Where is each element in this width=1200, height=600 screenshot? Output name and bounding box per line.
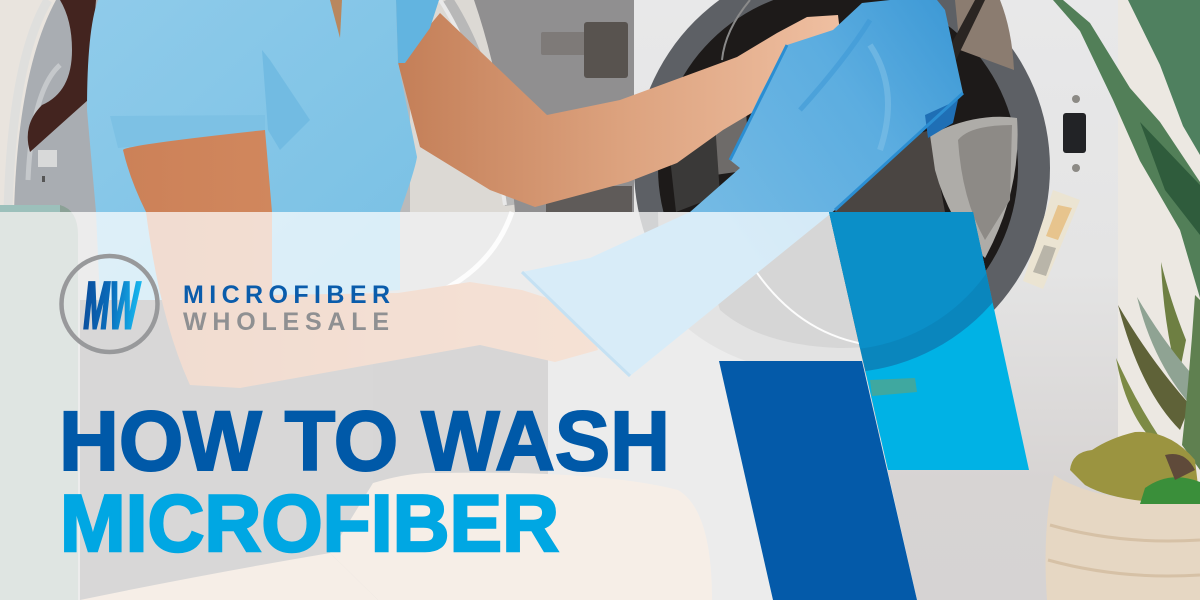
title line: microfiber: MICROFIBER [60, 479, 559, 569]
cyan parallelogram [829, 212, 1029, 470]
blue microfiber towel [522, 0, 963, 376]
drum with gasket [634, 0, 1050, 310]
plants and pot [1046, 0, 1200, 600]
machine details: latch, screws and safety sticker [1023, 95, 1086, 289]
logo ring [62, 256, 158, 352]
pot [1046, 475, 1200, 600]
aloe leaves [1053, 0, 1200, 298]
open door: left panel [8, 0, 100, 212]
left arm and hand [123, 130, 598, 388]
right arm [398, 13, 840, 207]
door ring at right of person [410, 0, 520, 300]
logo [62, 256, 390, 352]
dark blue parallelogram [719, 361, 917, 600]
hair [28, 0, 96, 152]
trousers [80, 300, 712, 600]
title [59, 394, 670, 569]
blue shirt [87, 0, 439, 300]
spiky plant [1116, 262, 1200, 470]
door hinge panel [474, 0, 634, 212]
white translucent overlay [0, 212, 917, 600]
moss [1070, 432, 1200, 504]
left wall strip [0, 0, 110, 212]
couch at left [0, 205, 78, 600]
title line: how to wash: HOW TO WASH [59, 394, 670, 488]
logo: MW [80, 269, 142, 343]
right wall [1115, 0, 1200, 600]
lower drum, seen through the overlay [658, 212, 890, 376]
logo wordmark: wholesale: WHOLESALE [183, 308, 389, 336]
logo wordmark: microfiber: MICROFIBER [183, 281, 390, 309]
washing machine front [430, 0, 1118, 600]
